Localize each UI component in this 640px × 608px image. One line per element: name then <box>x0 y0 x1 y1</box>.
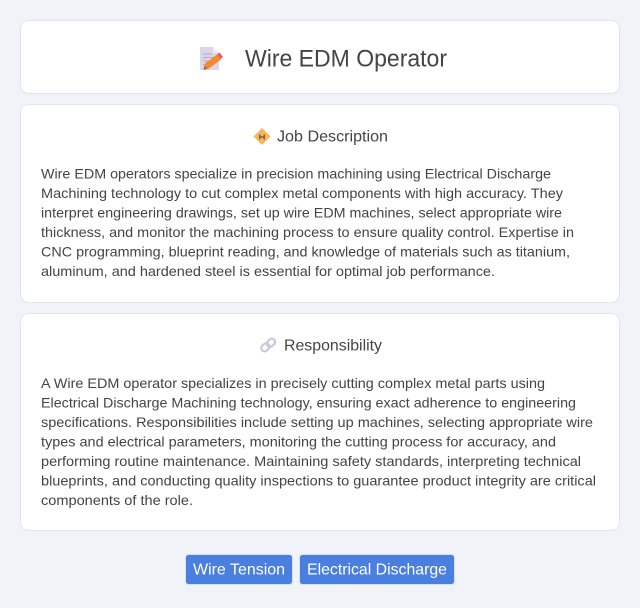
title text: Wire EDM Operator <box>245 46 447 72</box>
text block: responsibility: performing routine maintenance. Maintaining safety standards, interpreting technical <box>41 453 581 469</box>
tag: electrical discharge <box>300 554 454 584</box>
heading: job description: Job Description <box>277 128 388 146</box>
tag: wire tension <box>186 554 292 584</box>
text block: responsibility <box>41 375 596 508</box>
text block: responsibility: components of the role. <box>41 492 193 508</box>
text block: responsibility: types and electrical parameters, monitoring the cutting process for accuracy, and <box>41 434 556 450</box>
text block: responsibility: blueprints, and conducting quality inspections to guarantee product integrity are critical <box>41 472 596 488</box>
heading: responsibility: Responsibility <box>284 338 382 354</box>
panel: title <box>20 20 620 94</box>
text block: responsibility: A Wire EDM operator specializes in precisely cutting complex metal parts using <box>41 375 545 391</box>
text block: job description <box>41 166 574 279</box>
icon: document with pencil <box>200 47 223 70</box>
icon: chain link <box>260 337 276 353</box>
icon: orange diamond <box>254 129 270 144</box>
text block: job description: CNC programming, blueprint reading, and knowledge of materials such as titanium, <box>41 244 570 260</box>
text block: responsibility: Electrical Discharge Machining technology, ensuring exact adherence to engineering <box>41 394 576 410</box>
panel: responsibility <box>20 314 620 530</box>
text block: job description: Machining technology to cut complex metal components with high accuracy. They <box>41 185 563 201</box>
text block: job description: interpret engineering drawings, set up wire EDM machines, select appropriate wire <box>41 204 562 220</box>
text block: responsibility: specifications. Responsibilities include setting up machines, selecting appropriate wire <box>41 414 593 430</box>
text block: job description: thickness, and monitor the machining process to ensure quality control. Expertise in <box>41 224 574 240</box>
tag: electrical discharge: Electrical Discharge <box>307 562 447 578</box>
panel: job description <box>20 104 620 302</box>
tag: wire tension: Wire Tension <box>193 562 285 578</box>
text block: job description: aluminum, and hardened steel is essential for optimal job performance. <box>41 263 495 279</box>
text block: job description: Wire EDM operators specialize in precision machining using Electrical Discharge <box>41 166 551 182</box>
